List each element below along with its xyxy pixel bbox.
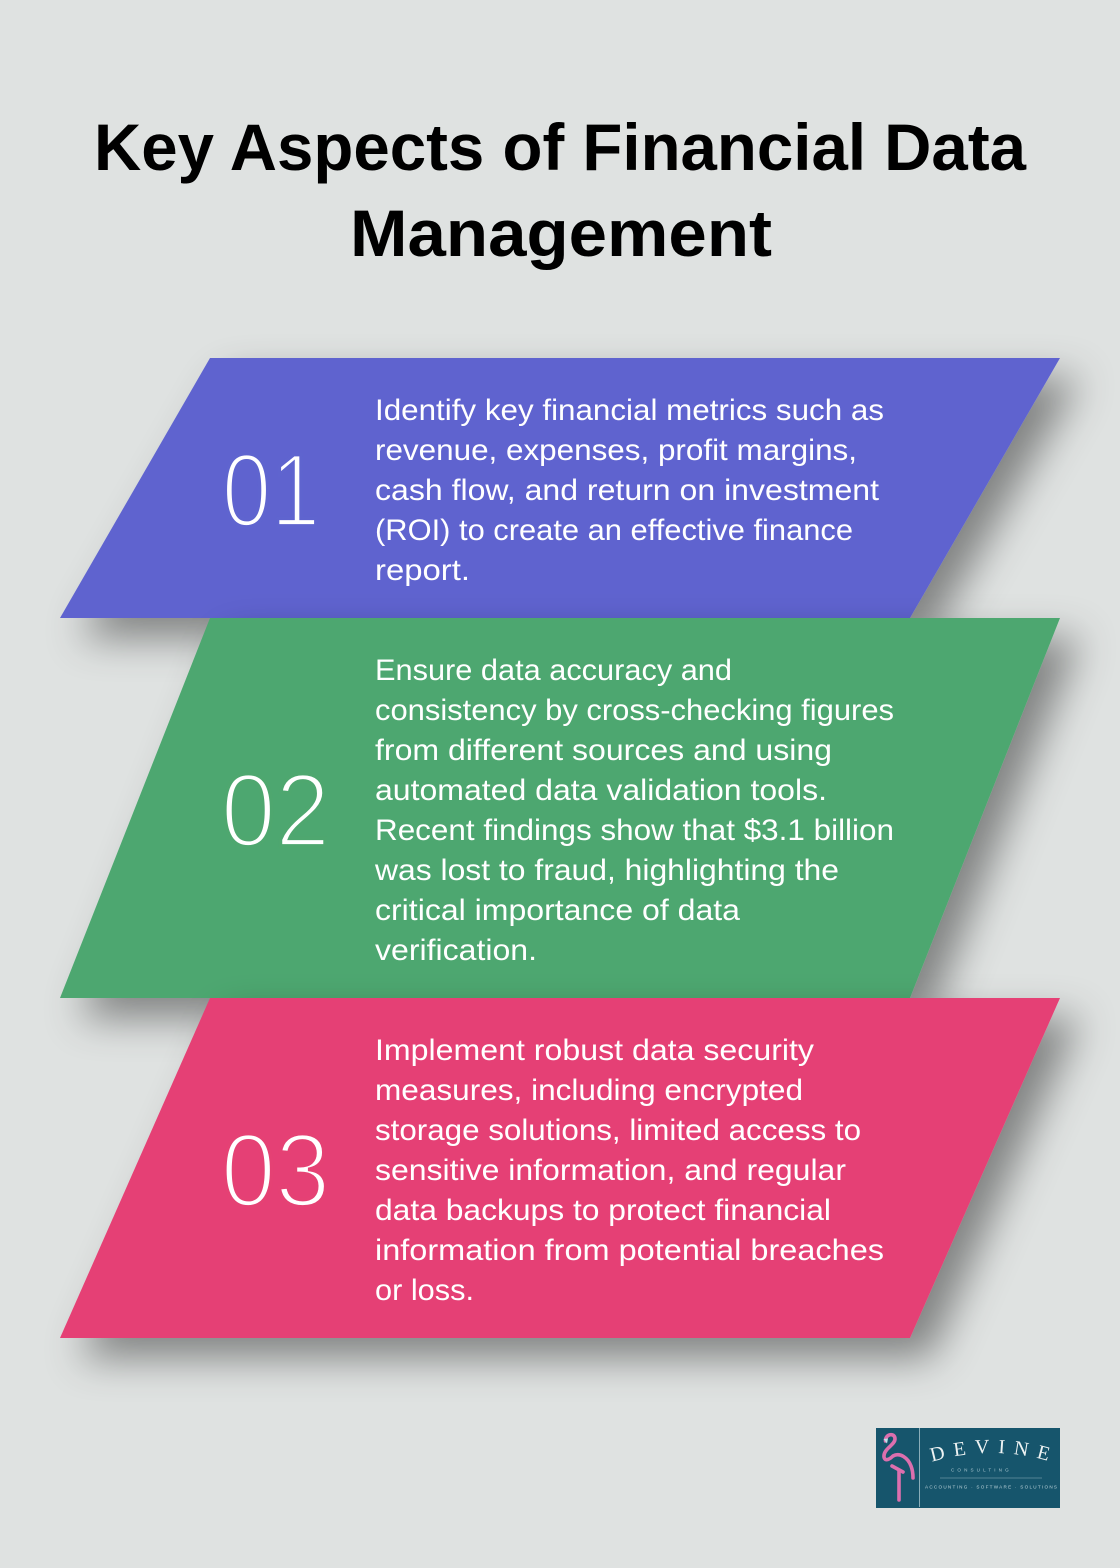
text: step 03 description: Implement robust data security bbox=[375, 1034, 814, 1067]
text: step 01 description: revenue, expenses, profit margins, bbox=[375, 434, 857, 467]
logo tagline: ACCOUNTING · SOFTWARE · SOLUTIONS bbox=[925, 1484, 1058, 1490]
text: step 02 description bbox=[374, 654, 894, 967]
number 03: 03 bbox=[221, 1113, 330, 1229]
text: step 01 description: (ROI) to create an effective finance bbox=[375, 514, 853, 547]
number 01: 01 bbox=[222, 433, 320, 549]
text: step 03 description: or loss. bbox=[375, 1274, 474, 1307]
logo: Devine Consulting: DEVINE bbox=[929, 1440, 1050, 1462]
logo wordmark bbox=[932, 1453, 1052, 1462]
text: step 02 description: Ensure data accuracy and bbox=[375, 654, 732, 687]
text: step 03 description: data backups to protect financial bbox=[375, 1194, 831, 1227]
text: step 01 description bbox=[375, 394, 884, 587]
text: step 02 description: verification. bbox=[375, 934, 537, 967]
text: step 02 description: from different sources and using bbox=[375, 734, 832, 767]
green parallelogram bbox=[60, 618, 1060, 998]
logo subtitle: CONSULTING bbox=[951, 1468, 1012, 1472]
number 02: 02 bbox=[221, 753, 330, 869]
text: step 03 description: storage solutions, limited access to bbox=[375, 1114, 861, 1147]
text: step 03 description: measures, including encrypted bbox=[375, 1074, 803, 1107]
text: step 02 description: consistency by cross-checking figures bbox=[375, 694, 894, 727]
panel: step 01 bbox=[60, 358, 1060, 618]
title: Management bbox=[350, 196, 772, 270]
blue parallelogram bbox=[60, 358, 1060, 618]
text: step 01 description: Identify key financial metrics such as bbox=[375, 394, 884, 427]
text: step 03 description: information from potential breaches bbox=[375, 1234, 884, 1267]
logo: Devine Consulting bbox=[876, 1428, 1060, 1508]
text: step 03 description: sensitive information, and regular bbox=[375, 1154, 846, 1187]
panel: step 02 bbox=[60, 618, 1060, 998]
text: step 03 description bbox=[375, 1034, 884, 1307]
text: step 02 description: was lost to fraud, highlighting the bbox=[374, 854, 839, 887]
icon: flamingo bbox=[884, 1435, 913, 1500]
panel: step 03 bbox=[60, 998, 1060, 1338]
text: step 01 description: report. bbox=[375, 554, 470, 587]
text: step 02 description: Recent findings show that $3.1 billion bbox=[375, 814, 894, 847]
title bbox=[94, 110, 1027, 270]
text: step 01 description: cash flow, and return on investment bbox=[375, 474, 879, 507]
text: step 02 description: critical importance of data bbox=[375, 894, 741, 927]
title: Key Aspects of Financial Data bbox=[94, 110, 1027, 184]
pink parallelogram bbox=[60, 998, 1060, 1338]
text: step 02 description: automated data validation tools. bbox=[375, 774, 827, 807]
